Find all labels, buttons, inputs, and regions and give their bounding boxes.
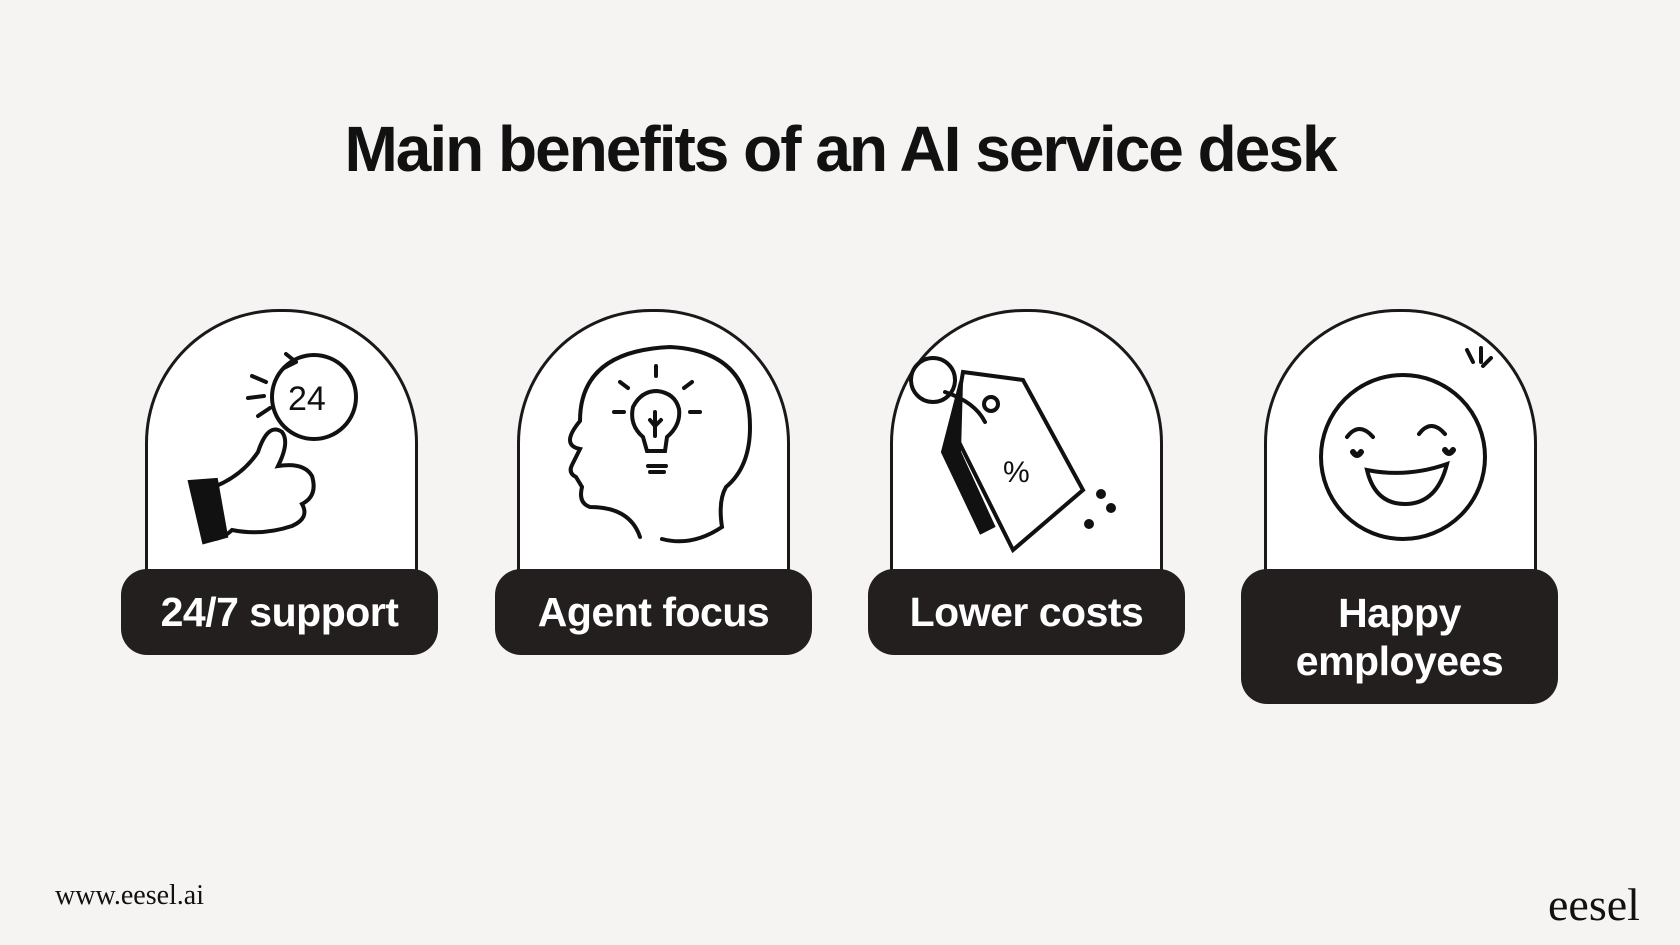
label: Lower costs: Lower costs xyxy=(910,589,1143,635)
label: Happy employees: Happy xyxy=(1338,590,1461,636)
label: Happy employees xyxy=(1241,569,1558,704)
label: Agent focus: Agent focus xyxy=(538,589,769,635)
label: 24/7 support xyxy=(121,569,438,655)
icon: price tag with percent: % xyxy=(1003,456,1030,489)
label: Happy employees: employees xyxy=(1296,638,1503,684)
panel: Agent focus xyxy=(517,309,790,574)
icon: price tag with percent xyxy=(909,356,1116,554)
title: Main benefits of an AI service desk xyxy=(344,113,1336,185)
label: 24/7 support: 24/7 support xyxy=(161,589,398,635)
footer: logo: eesel xyxy=(1548,879,1640,930)
footer: website: www.eesel.ai xyxy=(55,880,204,911)
icon: thumbs up with 24 clock xyxy=(188,352,358,544)
label: Agent focus xyxy=(495,569,812,655)
icon: thumbs up with 24 clock: 24 xyxy=(288,380,326,418)
panel: Lower costs xyxy=(890,309,1163,574)
icon: laughing face xyxy=(1319,346,1494,541)
label: Lower costs xyxy=(868,569,1185,655)
panel: 24/7 support xyxy=(145,309,418,574)
panel: Happy employees xyxy=(1264,309,1537,574)
icon: head with lightbulb xyxy=(568,345,752,544)
